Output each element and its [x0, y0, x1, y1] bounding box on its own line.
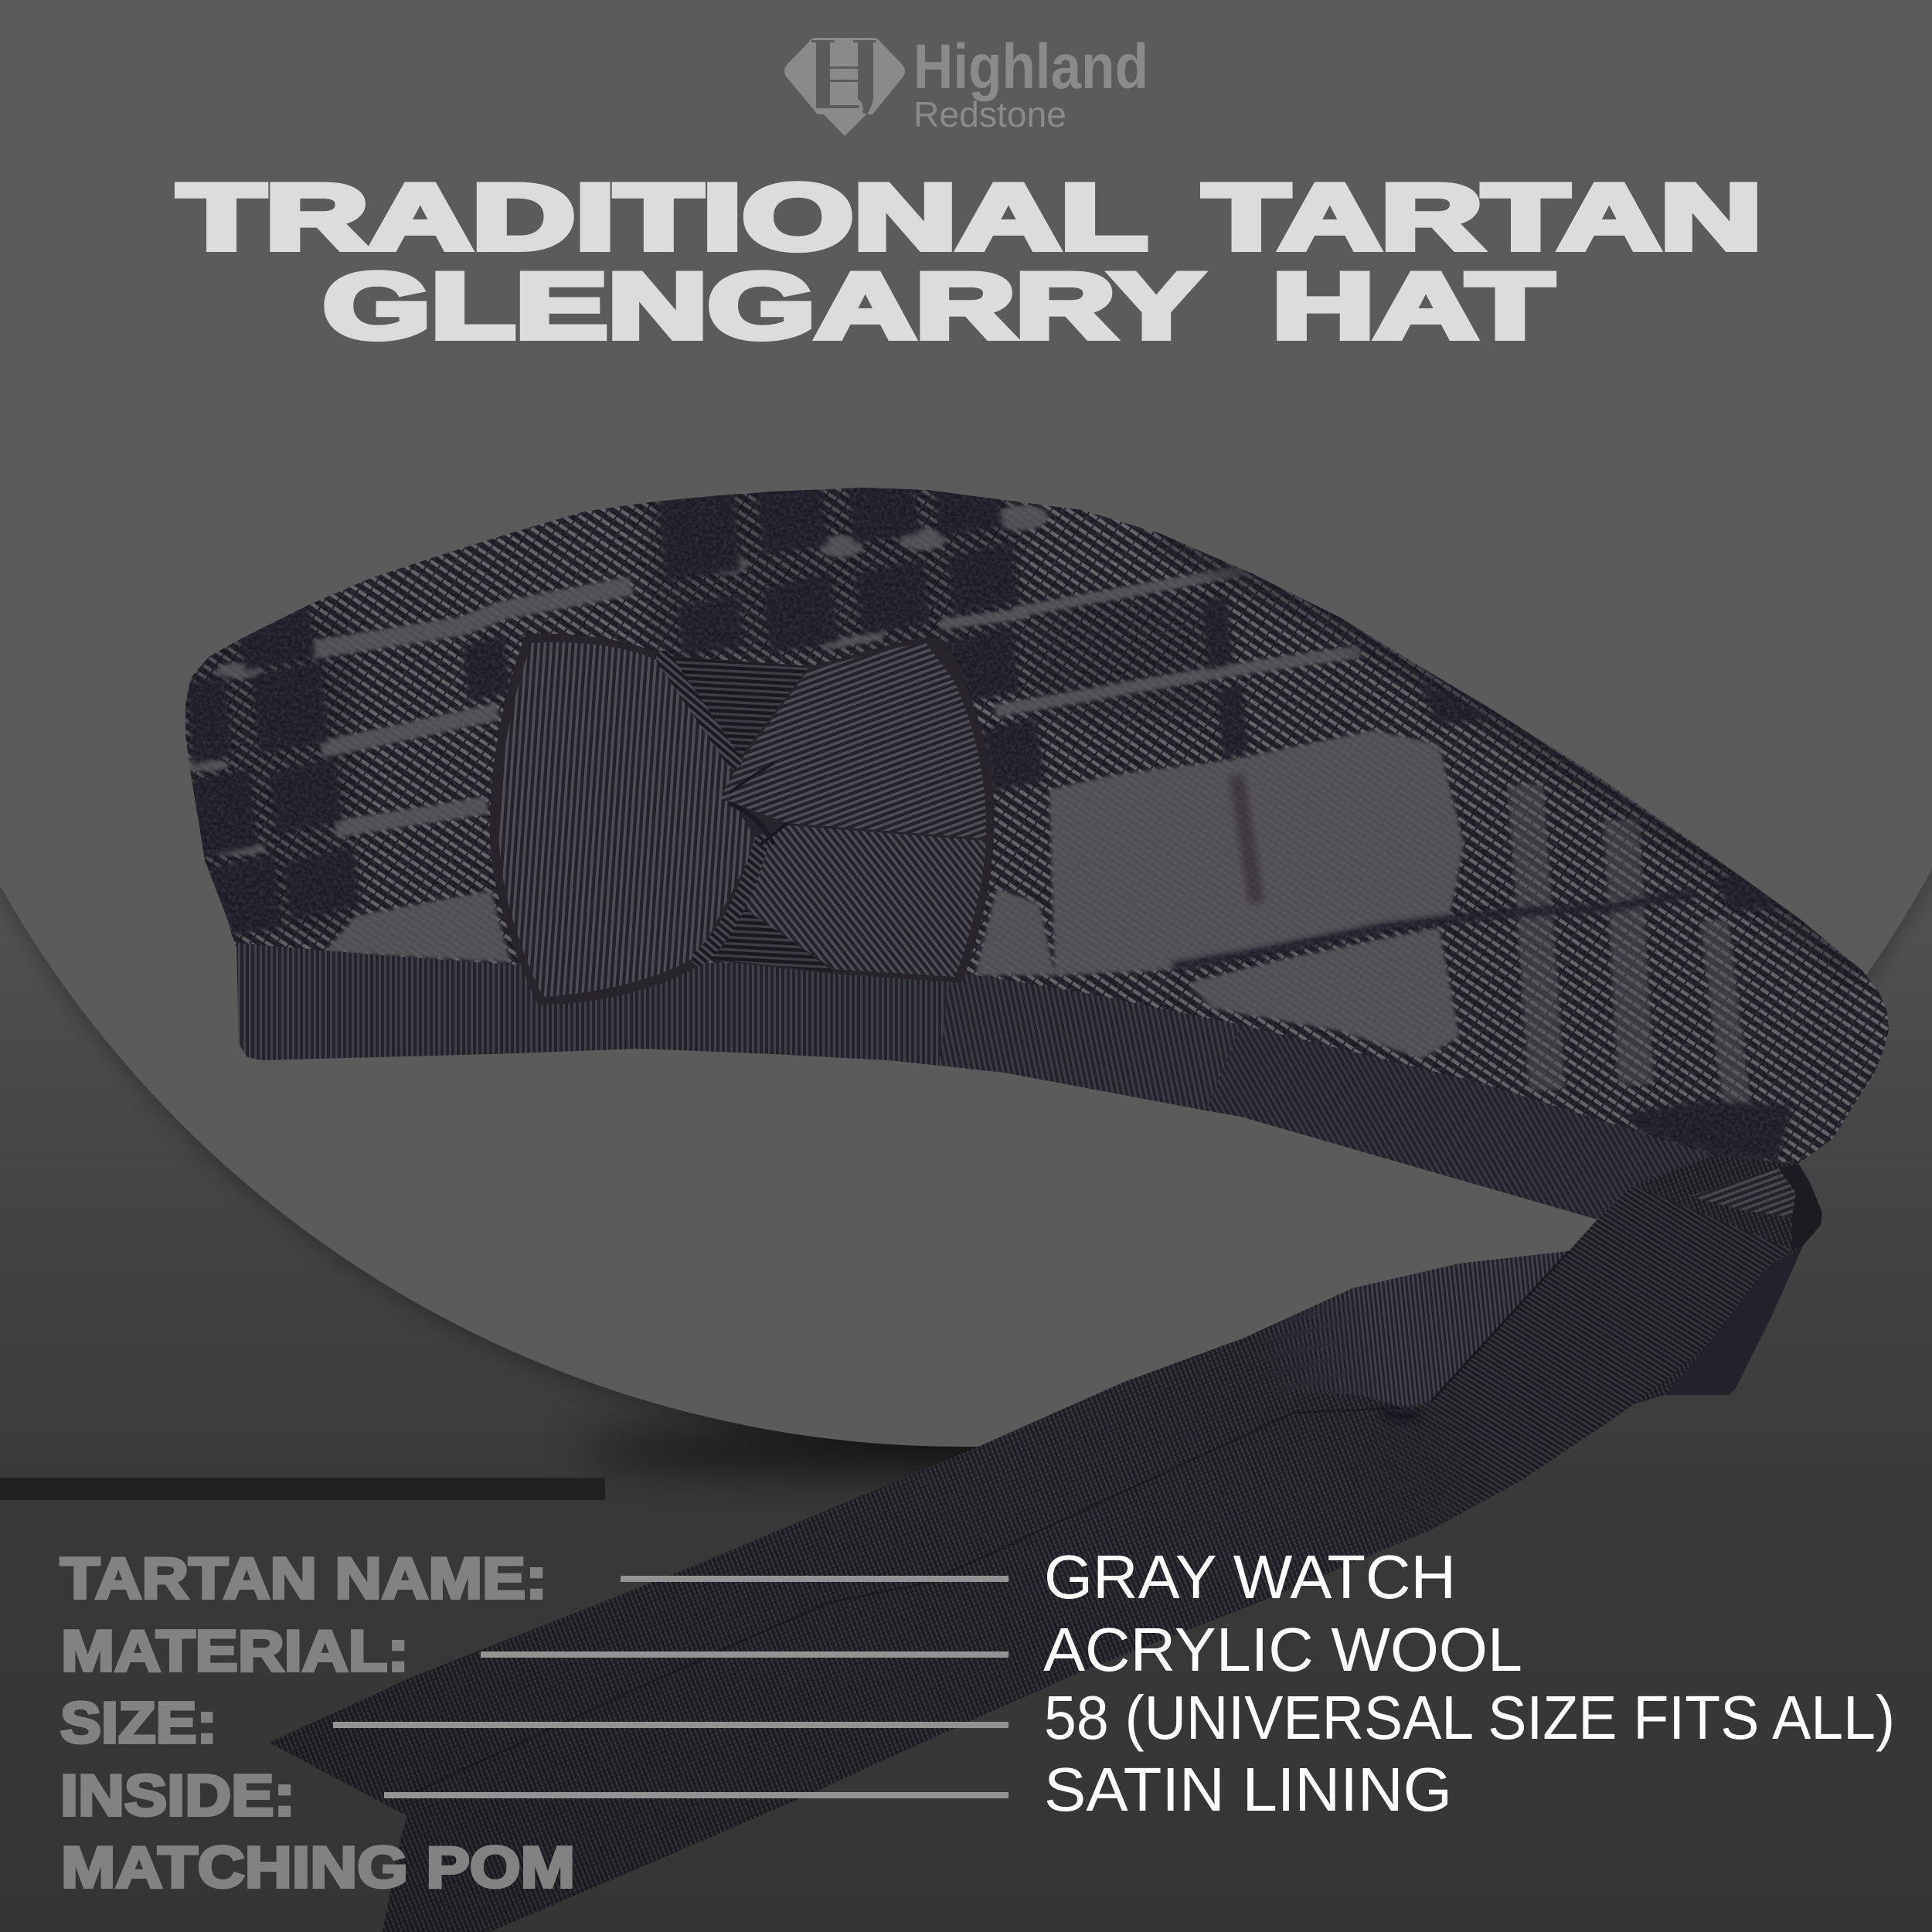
connector lines	[333, 1576, 1009, 1798]
bow: ribbon cockade	[490, 634, 995, 1005]
logo: Highland Redstone	[784, 32, 1148, 136]
tail seam and pinch	[414, 1251, 1569, 1792]
bow center ribbon bottom	[706, 900, 834, 972]
bow right upper wing	[720, 643, 986, 838]
bow right lower wing	[738, 825, 986, 977]
tartan: dark solid blocks	[185, 479, 1797, 1159]
tail ribbon	[269, 1155, 1822, 1932]
spec labels: MATERIAL:	[61, 1618, 409, 1683]
tail knot wedge	[1689, 1168, 1796, 1217]
bow left wing	[499, 642, 757, 997]
tartan: soft dark edge along the top right	[1159, 533, 1862, 971]
hat illustration	[155, 464, 1932, 1932]
bow outer silhouette	[490, 634, 995, 1005]
spec values	[1043, 1543, 1895, 1824]
tail dark back flap	[1665, 1246, 1803, 1395]
spec labels: MATCHING POM	[61, 1835, 575, 1900]
background circle with shadow	[0, 0, 1932, 1473]
bow center ribbon top	[664, 657, 809, 765]
logo icon: diamond with HJ monogram	[784, 38, 905, 136]
spec labels: TARTAN NAME:	[60, 1546, 547, 1611]
tail shading	[269, 1155, 1822, 1932]
logo wordmark: Redstone: Redstone	[913, 94, 1066, 134]
title: GLENGARRY	[323, 254, 1202, 358]
hat crown: tartan fabric	[185, 488, 1889, 1165]
spec labels: SIZE:	[60, 1690, 217, 1755]
dark accent bar	[0, 1478, 605, 1500]
spec values: 58 (UNIVERSAL SIZE FITS ALL)	[1044, 1683, 1895, 1752]
tail knot end	[1778, 1165, 1822, 1250]
spec values: GRAY WATCH	[1044, 1543, 1456, 1611]
title: TARTAN	[1203, 165, 1762, 269]
tail main ribbon	[269, 1155, 1822, 1932]
tail knot panel	[1369, 1185, 1792, 1536]
logo wordmark: Highland: Highland	[913, 32, 1148, 102]
spec labels: INSIDE:	[60, 1763, 295, 1828]
spec values: SATIN LINING	[1044, 1755, 1452, 1824]
tartan: gray zones and bands	[176, 505, 1743, 1159]
tartan: wool noise overlay	[185, 488, 1889, 1164]
hat band: ribbed ribbon	[236, 943, 1794, 1219]
title: HAT	[1272, 254, 1553, 358]
bow folds	[664, 658, 787, 958]
title: TRADITIONAL	[178, 165, 1148, 269]
spec labels	[60, 1546, 575, 1900]
tail upper fold panel	[1272, 1251, 1567, 1410]
spec values: ACRYLIC WOOL	[1043, 1615, 1522, 1684]
title	[178, 165, 1762, 358]
tartan: darker twill tones around the blocks	[185, 479, 1213, 935]
